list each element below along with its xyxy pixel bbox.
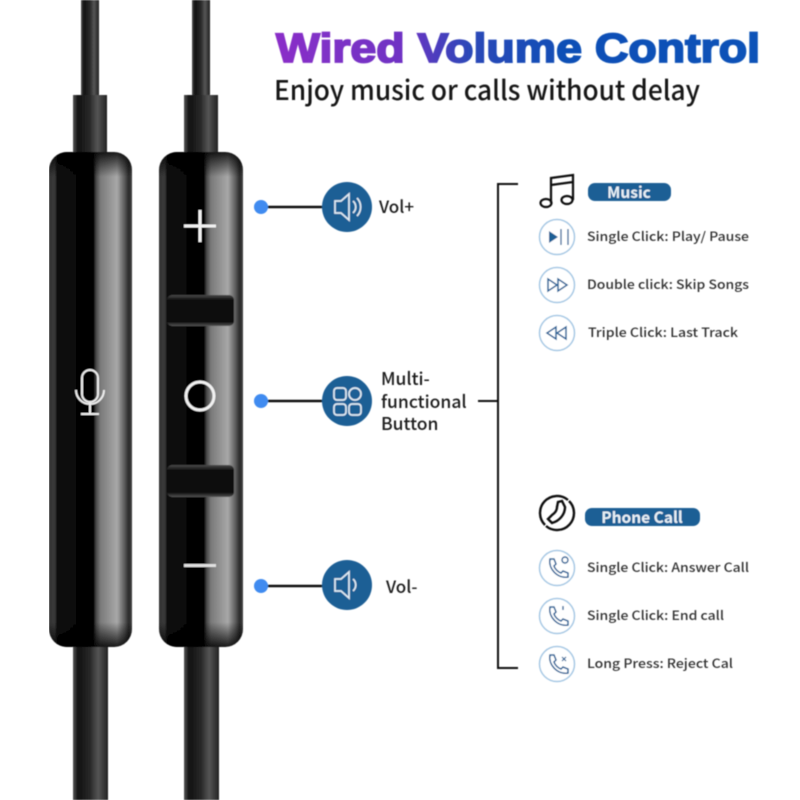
row: play pause: Single Click: Play/ Pause [587, 226, 749, 245]
row: end call: Single Click: End call [587, 605, 724, 624]
icon: microphone [76, 370, 104, 414]
panel: phone call [540, 496, 749, 682]
icon: speaker quiet [335, 572, 356, 598]
row: reject call: Long Press: Reject Cal [587, 653, 733, 672]
title: Wired Volume Control [276, 25, 760, 71]
left remote: microphone side [49, 0, 132, 800]
bracket connector [478, 184, 518, 668]
panel: music [540, 175, 749, 350]
left remote body [49, 152, 132, 647]
icon: speaker loud [335, 194, 361, 220]
icon: music notes [540, 175, 573, 207]
icon: phone in circle [540, 496, 574, 530]
callout: Vol- [254, 560, 417, 610]
callout: Multi-functional Button [254, 366, 467, 436]
top cable right [192, 0, 210, 100]
row: reject call [540, 646, 733, 682]
icon: plus button [184, 210, 216, 242]
row: play pause [540, 220, 749, 254]
label: multi-functional button: functional [381, 389, 467, 414]
right remote: button side [159, 0, 243, 800]
bottom cable left [73, 640, 108, 800]
label: multi-functional button: Multi- [381, 366, 430, 391]
right remote body [159, 152, 243, 647]
row: answer call [540, 550, 749, 586]
subtitle: Enjoy music or calls without delay [274, 69, 700, 108]
row: end call [540, 598, 724, 634]
phone call pill heading: Phone Call [601, 506, 683, 528]
top cable left [81, 0, 99, 100]
callout: Vol+ [254, 182, 414, 232]
row: skip: Double click: Skip Songs [587, 274, 749, 293]
icon: app grid [334, 388, 361, 415]
icon: circle button [186, 382, 214, 410]
lower slot [167, 465, 234, 497]
bottom cable right [184, 640, 219, 800]
upper slot [167, 295, 234, 326]
callout: Vol+: Vol+ [378, 193, 414, 218]
label: multi-functional button: Button [381, 411, 438, 436]
music pill heading [588, 181, 671, 203]
callout: Vol-: Vol- [385, 573, 417, 598]
icon: minus button [184, 564, 216, 567]
music pill heading: Music [607, 181, 651, 203]
row: answer call: Single Click: Answer Call [587, 557, 749, 576]
row: last track: Triple Click: Last Track [588, 322, 739, 341]
row: last track [540, 316, 739, 350]
row: skip [540, 268, 749, 302]
